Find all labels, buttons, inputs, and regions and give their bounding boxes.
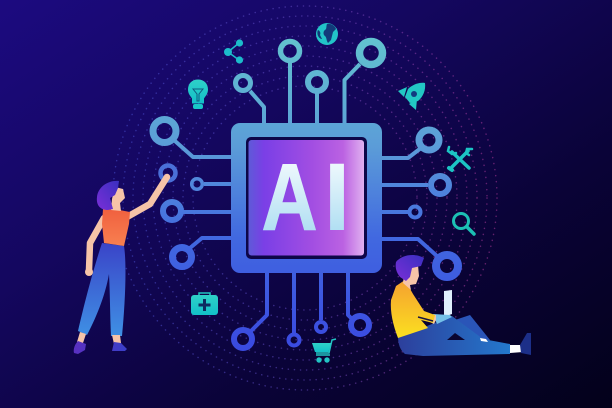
neck and face (403, 265, 419, 290)
legs (78, 243, 125, 336)
hand (85, 268, 93, 276)
AI label: I (325, 144, 349, 250)
sweater (391, 280, 435, 338)
dotted concentric rings (113, 6, 497, 390)
hair (396, 255, 424, 281)
circuit traces (175, 60, 438, 333)
far leg (440, 315, 490, 346)
shoes (74, 341, 127, 354)
icon: light bulb (188, 80, 208, 109)
ring: touched by woman (160, 166, 176, 180)
ankles (77, 332, 121, 344)
hand (428, 314, 436, 324)
arms (89, 177, 167, 270)
gap under knee (447, 333, 465, 340)
laptop screen (444, 290, 452, 317)
AI label: A (261, 144, 318, 250)
sleeve shadow (418, 317, 433, 321)
chip screen border (246, 137, 367, 259)
pants (398, 316, 510, 356)
icon: globe (316, 23, 338, 45)
socks (480, 338, 523, 353)
icon: shopping cart (312, 339, 336, 363)
icon: tools (448, 147, 472, 170)
icon: magnifier (454, 214, 474, 234)
icon: medical kit (191, 293, 218, 315)
icon: share (224, 39, 243, 64)
shirt (102, 209, 130, 246)
keyboard (433, 314, 452, 324)
AI label (261, 144, 349, 250)
circuit ring nodes (153, 42, 458, 348)
icon: rocket (398, 83, 425, 110)
chip (231, 123, 382, 273)
chip body (231, 123, 382, 273)
chip screen (248, 140, 364, 256)
shoe (520, 333, 531, 355)
hair (97, 181, 119, 210)
neck and face (111, 187, 125, 211)
woman figure (74, 177, 167, 354)
man figure (391, 255, 531, 356)
